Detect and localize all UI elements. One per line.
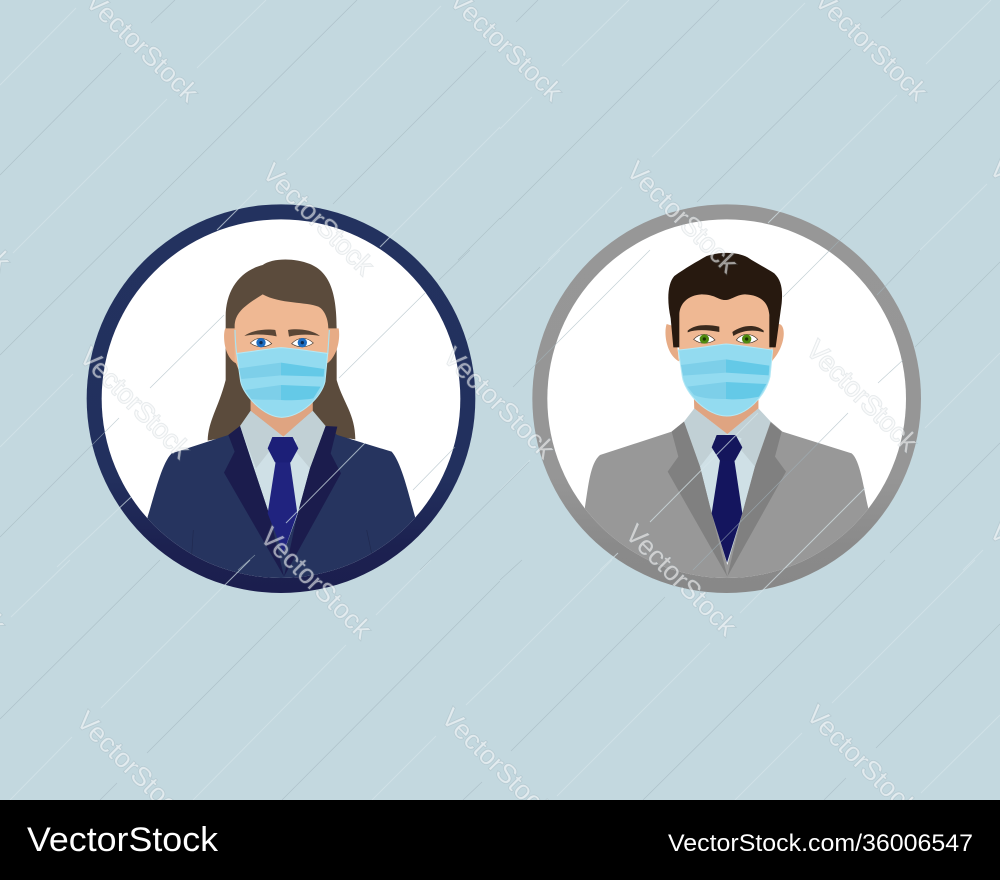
watermarks: VectorStock <box>435 702 559 826</box>
footer logo text: VectorStock <box>27 821 219 859</box>
watermarks: VectorStock <box>800 334 924 458</box>
watermarks: VectorStock <box>437 341 561 465</box>
eyebrows <box>244 329 320 337</box>
tie: navy <box>712 435 742 563</box>
eyebrows <box>688 325 764 336</box>
neck <box>693 387 758 434</box>
shirt <box>684 422 771 563</box>
footer bar <box>0 800 1000 880</box>
neck overlap <box>694 398 758 434</box>
watermarks: VectorStock <box>254 521 378 645</box>
watermarks: VectorStock <box>73 341 197 465</box>
hair: long brown <box>208 259 355 441</box>
watermarks: VectorStock <box>620 155 744 279</box>
collar <box>684 408 771 467</box>
jacket: grey <box>584 422 868 578</box>
face <box>235 294 328 407</box>
shirt <box>240 426 326 553</box>
circle: white interior <box>102 219 460 578</box>
tie: blue <box>268 437 298 553</box>
left eye: blue <box>250 338 272 347</box>
circle: white interior <box>547 219 906 578</box>
watermarks: VectorStock <box>256 157 380 281</box>
avatar: woman in navy suit with face mask <box>87 204 475 600</box>
footer image id text: VectorStock.com/36006547 <box>668 830 973 857</box>
collar <box>240 411 326 468</box>
ring: navy <box>87 204 475 593</box>
left eye: green <box>694 334 715 344</box>
lapels <box>668 422 786 577</box>
ears <box>665 324 784 361</box>
face mask <box>235 330 329 417</box>
lapels <box>224 426 341 577</box>
avatar: man in grey suit with face mask <box>532 204 921 600</box>
hair: short dark <box>668 253 782 347</box>
neck overlap <box>251 400 313 437</box>
jacket: navy <box>148 426 416 578</box>
neck <box>251 387 313 436</box>
watermarks: VectorStock <box>70 705 194 829</box>
face mask <box>678 344 773 416</box>
watermarks: VectorStock <box>619 518 743 642</box>
watermarks: VectorStock <box>800 699 924 823</box>
right eye: green <box>736 334 758 344</box>
ring: grey <box>532 204 921 593</box>
right eye: blue <box>292 338 313 347</box>
face <box>679 294 773 403</box>
ears <box>224 328 339 363</box>
